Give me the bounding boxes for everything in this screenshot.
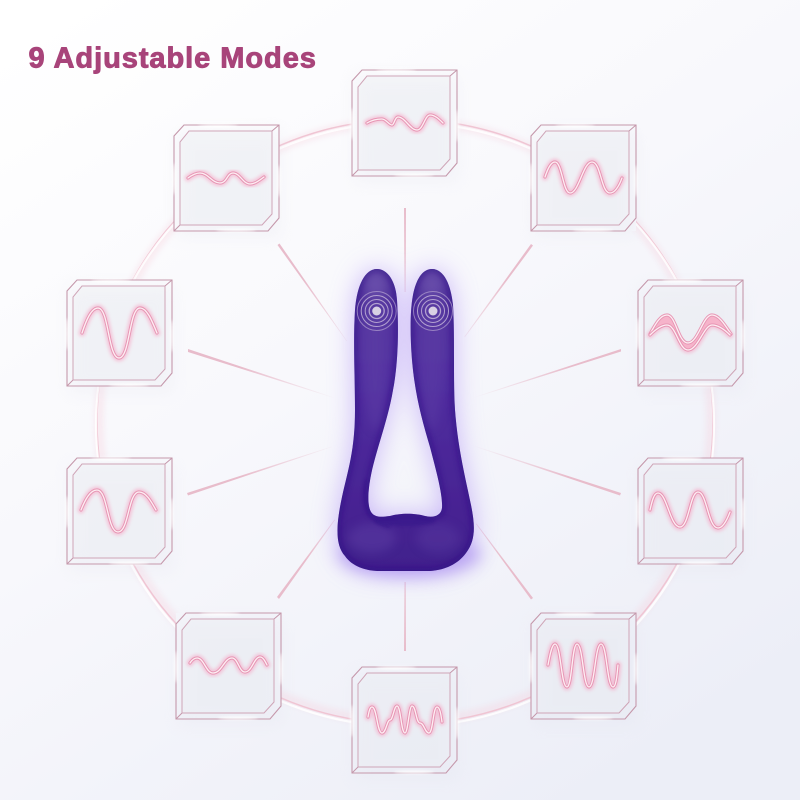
device glow <box>337 269 482 577</box>
icon: right vibration rings <box>414 292 452 330</box>
panel: mode lower right <box>529 612 638 725</box>
wave <box>367 115 443 130</box>
panel: mode top <box>350 69 459 182</box>
panel: mode bottom <box>350 666 459 779</box>
panel: mode right upper <box>636 279 745 392</box>
device: purple dual-prong vibrator <box>337 269 474 571</box>
wave <box>188 173 264 184</box>
panel: mode left upper <box>65 279 174 392</box>
device shading <box>337 269 474 571</box>
radiating lines around the device <box>187 208 621 651</box>
panel: mode upper left <box>172 124 281 237</box>
icon: left vibration rings <box>357 292 396 330</box>
wave <box>82 308 157 358</box>
panel: mode right lower <box>636 457 745 570</box>
panel: mode lower left <box>174 612 283 725</box>
wave <box>81 490 156 532</box>
wave <box>548 644 618 687</box>
wave <box>650 492 730 528</box>
wave <box>368 706 442 733</box>
wave <box>650 315 731 350</box>
ring connecting the mode panels <box>96 120 714 726</box>
panel: mode upper right <box>529 124 638 237</box>
wave <box>545 162 622 193</box>
wave <box>190 657 267 673</box>
title: 9 Adjustable Modes <box>28 42 317 74</box>
panel: mode left lower <box>65 457 174 570</box>
